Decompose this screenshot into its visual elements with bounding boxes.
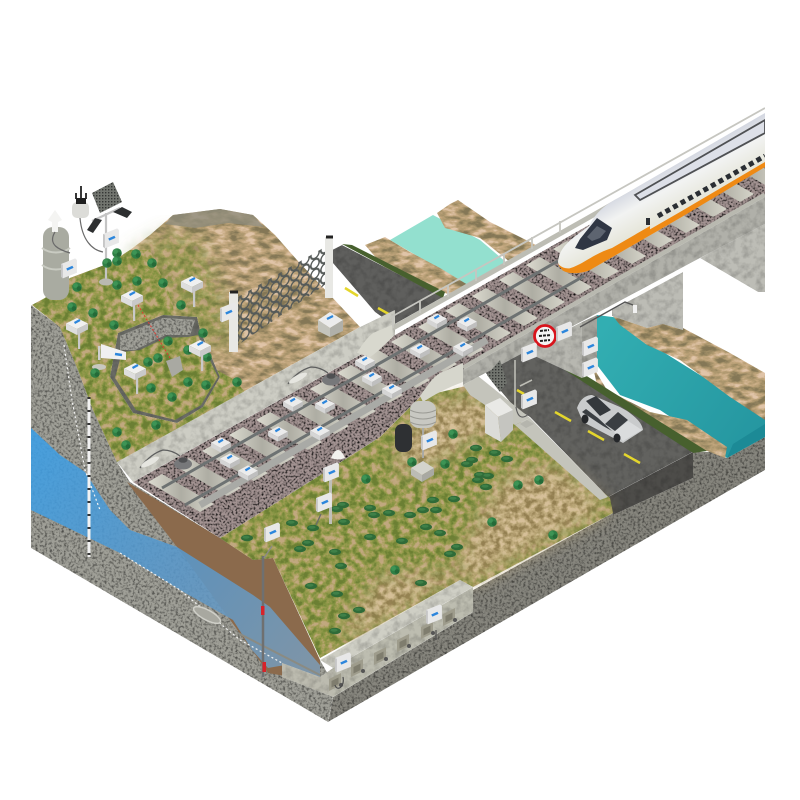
near road <box>485 342 707 515</box>
cabinet <box>485 398 513 442</box>
cabinet top <box>485 398 513 417</box>
pillar bands <box>42 248 70 270</box>
cabinet left <box>485 405 501 442</box>
post caps <box>230 237 333 292</box>
lower sensor cable <box>316 514 321 525</box>
tilt block <box>166 356 183 377</box>
pole cable <box>516 407 529 417</box>
side-mounted sensor <box>98 344 126 360</box>
hill upper wash <box>130 232 235 345</box>
orange livery <box>558 162 765 273</box>
temperature shield <box>72 186 89 218</box>
road side equipment <box>487 360 537 428</box>
anchor plates <box>329 608 457 691</box>
mast <box>422 428 424 458</box>
bridge camera <box>580 302 637 327</box>
lane dashes <box>344 286 390 314</box>
sign marks <box>539 330 551 341</box>
upper bank <box>612 315 765 420</box>
wall return <box>282 663 333 697</box>
road end face <box>608 452 693 515</box>
windscreen <box>605 412 628 431</box>
bridge sensors <box>521 302 637 377</box>
rail 1 <box>162 261 558 488</box>
wall top <box>320 580 473 668</box>
cabinet right <box>498 410 513 442</box>
concrete base <box>411 461 434 482</box>
segments <box>88 397 90 557</box>
track sensors <box>211 313 477 481</box>
soil wedge <box>127 482 320 678</box>
hillside <box>32 209 360 462</box>
gauge sensor <box>421 430 437 450</box>
lower bank <box>593 367 727 458</box>
inspection dome 1 <box>140 450 192 470</box>
retaining wall <box>282 580 473 697</box>
wheels <box>582 414 620 442</box>
solar panel <box>92 182 122 213</box>
well rod <box>262 556 264 677</box>
field grass <box>220 385 613 658</box>
cab door <box>646 218 650 225</box>
cross pipe <box>238 633 320 675</box>
block left face <box>31 305 333 722</box>
wall front <box>333 587 473 697</box>
hill post sensors <box>66 276 211 394</box>
hill weather station <box>72 182 132 286</box>
road surface <box>332 245 443 325</box>
isometric scene <box>31 107 765 722</box>
pillar sensor <box>61 258 77 278</box>
wall sensors <box>335 604 442 688</box>
mast <box>92 208 120 280</box>
rain gauge and shield <box>395 401 437 482</box>
hill grass <box>32 250 250 462</box>
camera right <box>113 207 132 218</box>
deep well <box>261 556 266 677</box>
curb <box>515 418 608 500</box>
rock cap <box>165 209 264 228</box>
pier end <box>582 315 597 378</box>
rear pier <box>612 272 683 330</box>
bridge piers <box>537 222 765 378</box>
train body <box>558 113 765 273</box>
grass verge <box>565 370 707 453</box>
pole <box>515 360 532 407</box>
tilt link <box>138 305 170 358</box>
upper parapet <box>393 118 765 328</box>
hill rock <box>32 209 360 462</box>
fence sensor <box>220 302 236 322</box>
lower parapet <box>463 195 765 368</box>
bridge structure <box>357 108 765 402</box>
far road <box>332 244 445 325</box>
louvre shield <box>410 401 436 428</box>
well cable <box>264 546 272 558</box>
inspection dome 2 <box>288 367 340 386</box>
field shrubs <box>241 429 558 634</box>
track inspection units <box>140 367 340 470</box>
cable trough <box>200 340 487 505</box>
pillar <box>43 227 69 300</box>
wall cables <box>335 630 436 688</box>
rockfall fence <box>220 237 333 352</box>
window band <box>658 156 765 216</box>
upper abutment bulge <box>357 325 393 357</box>
side glass <box>582 409 612 431</box>
far river <box>365 200 536 296</box>
lower field <box>220 385 613 658</box>
rear glass <box>586 396 611 416</box>
mesh <box>238 247 325 345</box>
well sensor <box>264 522 280 542</box>
bare ground front <box>345 465 605 645</box>
hill shrubs <box>67 248 242 450</box>
hood <box>614 421 642 441</box>
deck side <box>463 197 765 385</box>
landslide patch <box>110 315 220 423</box>
train <box>558 113 765 273</box>
far upper bank <box>437 200 536 262</box>
hill weather pillar <box>42 210 77 300</box>
pole base <box>520 420 534 428</box>
lower red sensor <box>262 662 266 672</box>
rails <box>162 261 584 505</box>
car body <box>577 395 643 443</box>
grass verge <box>342 244 445 298</box>
groundwater <box>31 428 320 678</box>
pole sensor <box>521 389 537 409</box>
block sensor <box>318 312 343 337</box>
road surface <box>485 342 693 497</box>
right post <box>325 237 333 298</box>
sleepers <box>148 133 800 512</box>
bridge sign <box>534 326 556 346</box>
roof panel <box>635 120 765 200</box>
station cable <box>80 218 103 252</box>
lane dashes <box>517 390 640 463</box>
block right face <box>328 437 765 722</box>
scarp rock <box>120 318 195 350</box>
lower sensor <box>316 492 332 512</box>
lower abutment bulge <box>420 363 463 402</box>
windscreen glare <box>587 226 606 241</box>
casing <box>88 397 90 557</box>
far lower bank <box>365 237 468 296</box>
left borehole <box>88 397 90 557</box>
rain gauge <box>395 424 412 452</box>
left post <box>229 292 238 352</box>
slide vegetation <box>115 335 218 420</box>
near river <box>593 315 765 458</box>
windscreen <box>575 218 612 250</box>
nose orange sweep <box>562 226 650 273</box>
pipe end <box>191 604 223 626</box>
field sensors <box>264 450 345 558</box>
water end face <box>727 424 765 458</box>
scarp rim <box>110 315 220 423</box>
pillar cable <box>53 232 70 253</box>
upper red sensor <box>261 606 264 615</box>
well head <box>92 364 106 370</box>
far pier <box>700 222 765 292</box>
handrail <box>393 108 765 328</box>
dotted cable <box>64 345 282 663</box>
concrete side strip <box>117 310 395 482</box>
dome sensor mast <box>323 450 345 524</box>
base disc <box>99 278 113 286</box>
mesh plate <box>487 360 507 392</box>
far water <box>390 215 507 285</box>
rail 2 <box>185 276 584 505</box>
track ballast <box>133 125 765 538</box>
antenna dome <box>48 210 62 232</box>
station sensor <box>103 228 119 248</box>
near water <box>597 315 765 458</box>
bare ground rear <box>395 392 520 475</box>
pad by bridge <box>463 376 530 425</box>
car <box>577 395 643 443</box>
camera left <box>87 218 102 233</box>
louvre lines <box>410 410 436 425</box>
front pier <box>537 322 582 378</box>
sign disc <box>534 326 556 346</box>
